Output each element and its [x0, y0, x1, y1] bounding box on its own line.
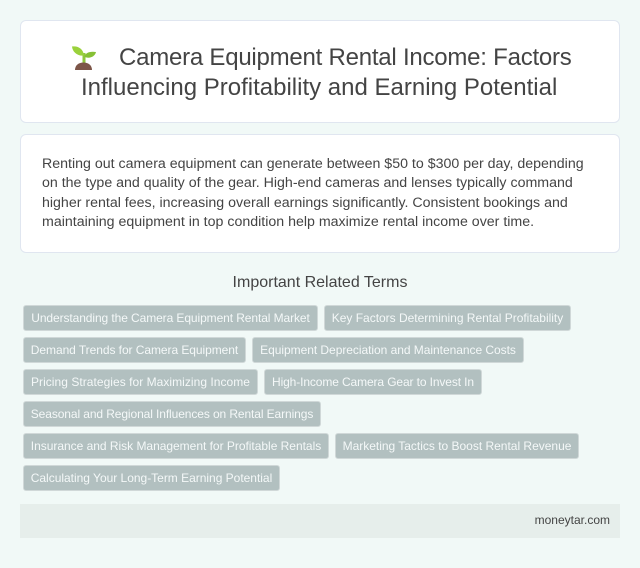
tag — [324, 305, 571, 331]
tag — [335, 433, 579, 459]
summary text: higher rental fees, increasing overall earnings significantly. Consistent bookings and — [42, 195, 568, 211]
title text — [81, 44, 572, 101]
summary text: on the type and quality of the gear. High-end cameras and lenses typically command — [42, 175, 573, 191]
tag — [23, 433, 329, 459]
footer bar — [20, 504, 620, 538]
tag: Insurance and Risk Management for Profitable Rentals — [31, 439, 321, 453]
tag: Calculating Your Long-Term Earning Potential — [31, 471, 272, 485]
tag: Marketing Tactics to Boost Rental Revenue — [343, 439, 571, 453]
tag: Understanding the Camera Equipment Rental Market — [31, 311, 310, 325]
icon: seedling — [72, 46, 96, 70]
tag — [252, 337, 524, 363]
panel: title card — [20, 20, 620, 123]
tag: Key Factors Determining Rental Profitability — [332, 311, 563, 325]
summary text — [42, 156, 584, 230]
summary text: maintaining equipment in top condition help maximize rental income over time. — [42, 214, 534, 230]
tag — [23, 337, 246, 363]
tag: Seasonal and Regional Influences on Rental Earnings — [31, 407, 313, 421]
tag: Demand Trends for Camera Equipment — [31, 343, 238, 357]
tag — [23, 465, 280, 491]
tag: Pricing Strategies for Maximizing Income — [31, 375, 250, 389]
title line 1: Camera Equipment Rental Income: Factors — [119, 44, 572, 71]
tag — [23, 401, 321, 427]
tag — [23, 305, 318, 331]
tag — [23, 369, 258, 395]
tag — [264, 369, 482, 395]
summary text: Renting out camera equipment can generate between $50 to $300 per day, depending — [42, 156, 584, 172]
footer text: source: moneytar.com — [535, 513, 610, 527]
heading: important related terms: Important Related Terms — [233, 274, 407, 291]
tag: High-Income Camera Gear to Invest In — [272, 375, 474, 389]
panel: summary card — [20, 134, 620, 253]
title line 2: Influencing Profitability and Earning Potential — [81, 74, 557, 101]
tag list — [23, 305, 579, 491]
tag: Equipment Depreciation and Maintenance Costs — [260, 343, 516, 357]
